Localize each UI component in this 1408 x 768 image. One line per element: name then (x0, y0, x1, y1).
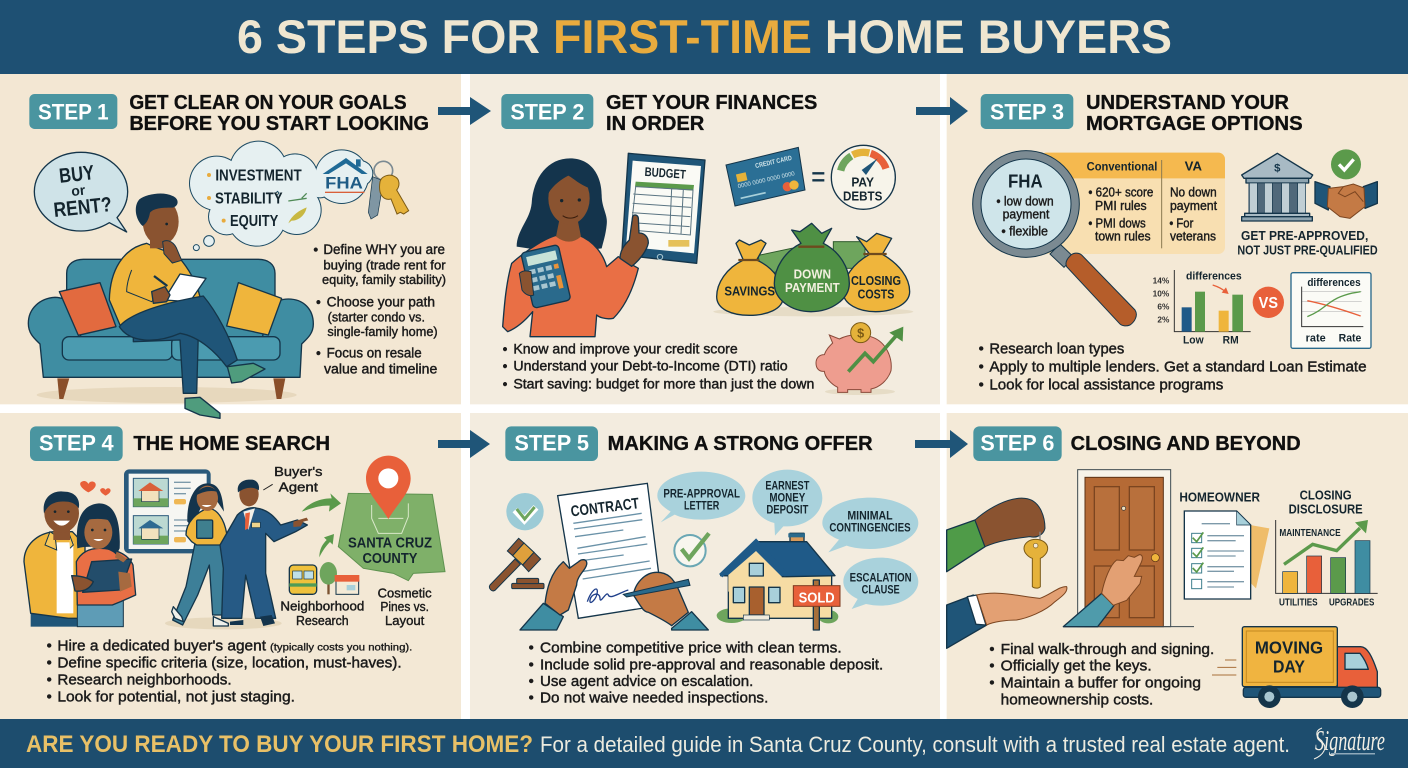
bar chart: loan differences: 2% (1157, 315, 1169, 324)
step 3 heading: UNDERSTAND YOUR (1086, 92, 1289, 114)
icon: magnifying glass FHA: FHA (1008, 170, 1043, 191)
map: santa cruz county: COUNTY (362, 551, 418, 567)
step 3 badge: STEP 3 (990, 99, 1064, 124)
calculator (521, 245, 571, 308)
loan comparison table: PMI rules (1095, 199, 1147, 213)
step 1 bullet list: buying (trade rent for (323, 258, 446, 272)
icon: credit gauge pay debts: PAY (851, 175, 874, 190)
icon: credit gauge pay debts (831, 145, 895, 209)
step 3 bullet list: • (979, 377, 984, 393)
step 4 bullet list (47, 639, 412, 706)
loan comparison table: • PMI dows (1088, 217, 1146, 231)
footer guidance text: For a detailed guide in Santa Cruz County, consult with a trusted real estate agent. (540, 732, 1290, 757)
label: get pre-approved: NOT JUST PRE-QUALIFIED (1237, 243, 1378, 257)
footer banner (0, 719, 1408, 768)
step 1 badge: STEP 1 (38, 99, 109, 124)
illustration: open receiving hand (947, 587, 1067, 648)
icon: sold house: SOLD (799, 590, 835, 606)
line chart: rate comparison (1291, 273, 1371, 348)
callout: buy or rent: BUY (58, 161, 95, 188)
thought cloud: INVESTMENT (215, 168, 302, 185)
label: neighborhood research (280, 600, 364, 628)
icon: moving truck: DAY (1273, 657, 1305, 677)
step 1 bullet list (313, 242, 446, 376)
step 4 bullet list: (typically costs you nothing). (270, 643, 412, 654)
pointing hand (620, 215, 648, 266)
callout: escalation clause: ESCALATION (850, 571, 912, 585)
callout: buy or rent: or (70, 182, 86, 199)
step 1 bullet list: Define WHY you are (323, 242, 445, 257)
step 1 bullet list: Focus on resale (327, 346, 422, 361)
step 3 bullet list: • (979, 360, 984, 376)
step 3 badge (981, 94, 1073, 129)
step 6 bullet list: Maintain a buffer for ongoing (1001, 676, 1201, 692)
icon: moving truck: MOVING (1255, 638, 1323, 658)
step 4 bullet list: Hire a dedicated buyer's agent (57, 639, 266, 655)
bar chart: homeownership costs: UTILITIES (1279, 598, 1318, 609)
step 4 bullet list: Research neighborhoods. (57, 672, 232, 688)
icon: magnifying glass FHA: • low down (996, 194, 1054, 208)
step 5 badge: STEP 5 (514, 431, 589, 456)
map: santa cruz county: SANTA CRUZ (348, 536, 432, 552)
hand with pen (672, 612, 708, 630)
callout: earnest money deposit (752, 470, 822, 536)
loan comparison table: No down (1170, 186, 1217, 200)
label: buyer's agent (263, 465, 322, 495)
bar chart: loan differences: RM (1223, 334, 1239, 346)
step 5 bullet list: Combine competitive price with clean terms. (540, 640, 842, 656)
icon: money bags: PAYMENT (785, 281, 840, 295)
step 4 bullet list: • (47, 639, 52, 655)
closing costs bag (843, 233, 910, 312)
icon: bank building (1242, 153, 1313, 221)
checklist document (1184, 511, 1269, 599)
step 1 bullet list: • (316, 346, 321, 361)
icon: money bags: DOWN (794, 267, 831, 281)
icon: magnifying glass FHA (973, 151, 1136, 326)
callout: minimal contingencies: MINIMAL (847, 508, 893, 522)
step 3 bullet list (979, 341, 1367, 393)
step 4 bullet list: • (47, 690, 52, 706)
label: cosmetic vs layout: Layout (385, 614, 425, 628)
loan comparison table: • For (1169, 217, 1193, 231)
map pin (366, 456, 411, 519)
icon: versus badge (1253, 287, 1284, 318)
step 1 heading: BEFORE YOU START LOOKING (129, 113, 429, 135)
panel: step 1 get clear on your goals (0, 74, 461, 418)
icon: check badge (506, 493, 544, 530)
icon: school bus, tree and shop (289, 562, 359, 594)
bar chart: loan differences: 10% (1153, 290, 1169, 299)
label: cosmetic vs layout: Cosmetic (378, 586, 432, 600)
thought cloud: STABILITY (215, 190, 283, 207)
icon: FHA house logo (323, 158, 368, 193)
step 3 heading: MORTGAGE OPTIONS (1086, 113, 1303, 135)
label: buyer's agent: Agent (279, 481, 319, 495)
step 6 bullet list: Final walk-through and signing. (1001, 642, 1214, 658)
icon: handshake (1315, 182, 1377, 218)
line chart: rate comparison: rate (1306, 333, 1326, 345)
step 6 bullet list: • (989, 659, 994, 675)
illustration: happy couple with tablet (24, 481, 136, 627)
step 1 bullet list: value and timeline (324, 361, 437, 376)
icon: magnifying glass FHA: payment (1003, 208, 1050, 222)
step 3 bullet list: Look for local assistance programs (989, 377, 1223, 393)
arrows toward map (302, 493, 341, 557)
bar chart: loan differences (1153, 270, 1251, 346)
step 1 badge (29, 94, 117, 129)
step 2 heading: GET YOUR FINANCES (606, 92, 817, 114)
step 2 bullet list: Know and improve your credit score (513, 341, 738, 356)
loan comparison table: • 620+ score (1088, 186, 1153, 200)
callout: buy or rent (34, 152, 128, 232)
step 3 bullet list: • (979, 341, 984, 357)
illustration: hand dangling key (947, 498, 1048, 588)
label: cosmetic vs layout (378, 586, 432, 628)
step 5 bullet list: • (529, 640, 534, 656)
step 5 bullet list (529, 640, 883, 707)
step 2 bullet list: Start saving: budget for more than just the down (513, 376, 814, 391)
step 5 bullet list: Include solid pre-approval and reasonable deposit. (540, 657, 883, 673)
step 5 bullet list: • (529, 674, 534, 690)
illustration: person thinking on sofa (28, 194, 313, 403)
step 3 bullet list: Research loan types (989, 341, 1124, 357)
callout: buy or rent: RENT? (52, 193, 113, 222)
bar chart: loan differences: 14% (1153, 276, 1169, 285)
step 3 heading (1086, 92, 1303, 135)
step 6 bullet list: Officially get the keys. (1001, 659, 1152, 675)
panel: step 5 making a strong offer (470, 413, 940, 719)
loan comparison table: VA (1185, 160, 1202, 174)
panel: step 4 the home search (0, 413, 461, 719)
header banner (0, 0, 1408, 74)
label: closing disclosure (1289, 488, 1363, 516)
illustration: hand pushing door (1063, 555, 1142, 627)
illustration: woman and buyer's agent (165, 480, 308, 629)
step 1 heading (129, 92, 429, 135)
icon: gavel (489, 538, 544, 591)
step 6 bullet list: homeownership costs. (1001, 692, 1153, 708)
label: buyer's agent: Buyer's (274, 465, 322, 479)
arrow: step 2 to step 3 (916, 97, 968, 125)
illustration: front door (1063, 470, 1194, 627)
thought cloud (189, 141, 373, 251)
bar chart: loan differences: differences (1186, 270, 1242, 282)
callout: earnest money deposit: DEPOSIT (766, 503, 809, 517)
callout: earnest money deposit: EARNEST (765, 479, 810, 493)
hand holding document (520, 603, 563, 630)
illustration: listing screen (124, 469, 211, 553)
icon: house keys (368, 161, 409, 219)
callout: escalation clause (843, 558, 918, 609)
arrow: step 5 to step 6 (915, 430, 968, 458)
step 5 bullet list: Do not waive needed inspections. (540, 691, 768, 707)
loan comparison table: payment (1170, 199, 1217, 213)
equals sign (812, 173, 824, 180)
step 1 heading: GET CLEAR ON YOUR GOALS (129, 92, 407, 114)
step 5 heading: MAKING A STRONG OFFER (608, 433, 873, 455)
step 5 badge (505, 426, 598, 461)
notepad (164, 274, 206, 302)
step 6 bullet list: • (989, 642, 994, 658)
callout: minimal contingencies: CONTINGENCIES (829, 521, 911, 535)
icon: check mark circle (674, 533, 709, 566)
step 5 bullet list: • (529, 691, 534, 707)
step 1 bullet list: (starter condo vs. (328, 311, 425, 325)
step 4 heading: THE HOME SEARCH (133, 433, 330, 455)
callout: minimal contingencies (822, 498, 918, 552)
loan comparison table (1040, 153, 1225, 254)
step 4 bullet list: Look for potential, not just staging. (57, 690, 295, 706)
icon: lower shoe (185, 397, 220, 418)
illustration: woman with calculator (503, 158, 638, 337)
map: santa cruz county (338, 456, 445, 581)
icon: money bags: CLOSING (851, 274, 901, 288)
step 2 bullet list: • (503, 341, 508, 356)
icon: money bags (713, 223, 913, 316)
step 6 bullet list (989, 642, 1214, 708)
step 2 bullet list: Understand your Debt-to-Income (DTI) ratio (513, 359, 788, 374)
bar chart: loan differences: 6% (1157, 302, 1169, 311)
callout: pre-approval letter: LETTER (684, 499, 720, 513)
step 2 badge: STEP 2 (510, 99, 584, 124)
contract document with signing hands: CONTRACT (570, 495, 641, 520)
step 4 bullet list: • (47, 672, 52, 688)
callout: pre-approval letter (657, 472, 745, 522)
pants (133, 327, 198, 393)
step 1 bullet list: Choose your path (327, 295, 435, 310)
step 1 bullet list: single-family home) (327, 325, 438, 339)
line chart: rate comparison: Rate (1339, 333, 1361, 345)
step 1 bullet list: • (313, 242, 318, 257)
arrow: step 4 to step 5 (438, 430, 490, 458)
bar chart: loan differences: Low (1183, 334, 1204, 346)
icon: money bags: SAVINGS (724, 284, 775, 298)
callout: pre-approval letter: PRE-APPROVAL (663, 487, 740, 501)
label: neighborhood research: Research (296, 614, 349, 628)
icon: budget tablet: BUDGET (644, 165, 687, 182)
step 4 badge (30, 426, 123, 461)
step 2 bullet list (503, 341, 814, 391)
panel: step 3 understand your mortgage options (947, 74, 1408, 404)
icon: FHA house logo: FHA (325, 173, 363, 192)
step 2 bullet list: • (503, 359, 508, 374)
icon: piggy bank with growth arrow: $ (857, 326, 864, 340)
footer call to action: ARE YOU READY TO BUY YOUR FIRST HOME? (26, 731, 533, 758)
callout: escalation clause: CLAUSE (862, 583, 900, 597)
step 5 bullet list: Use agent advice on escalation. (540, 674, 753, 690)
step 6 badge: STEP 6 (980, 431, 1054, 456)
icon: credit card (726, 147, 805, 206)
icon: money bags: COSTS (858, 288, 894, 302)
icon: sold house (717, 533, 840, 630)
step 2 heading: IN ORDER (606, 113, 705, 135)
step 4 bullet list: • (47, 656, 52, 672)
icon: credit card: CREDIT CARD (755, 155, 793, 170)
label: cosmetic vs layout: Pines vs. (380, 600, 429, 614)
contract document with signing hands (520, 483, 708, 630)
step 5 bullet list: • (529, 657, 534, 673)
icon: piggy bank with growth arrow (816, 323, 903, 395)
torso (109, 243, 200, 325)
savings bag (717, 240, 783, 315)
icon: bank building: $ (1274, 163, 1281, 175)
label: get pre-approved: GET PRE-APPROVED, (1241, 229, 1368, 243)
panel: step 2 get your finances in order (470, 74, 940, 404)
icon: moving truck (1212, 627, 1381, 708)
loan comparison table: town rules (1095, 230, 1151, 244)
thought cloud: EQUITY (230, 213, 279, 230)
step 6 bullet list: • (989, 676, 994, 692)
label: closing disclosure: DISCLOSURE (1289, 502, 1363, 516)
line chart: rate comparison: differences (1307, 277, 1361, 289)
icon: approved check (1331, 149, 1361, 179)
label: closing disclosure: CLOSING (1300, 488, 1352, 502)
bar chart: homeownership costs: UPGRADES (1329, 598, 1375, 609)
step 2 bullet list: • (503, 376, 508, 391)
panel: step 6 closing and beyond (947, 413, 1408, 719)
icon: budget tablet (620, 153, 705, 266)
shoe (227, 363, 265, 383)
step 3 bullet list: Apply to multiple lenders. Get a standard Loan Estimate (989, 360, 1367, 376)
step 6 heading: CLOSING AND BEYOND (1071, 433, 1301, 455)
step 2 badge (501, 94, 593, 129)
icon: versus badge: VS (1259, 295, 1278, 312)
step 6 badge (973, 426, 1062, 461)
callout: earnest money deposit: MONEY (769, 491, 805, 505)
step 2 heading (606, 92, 817, 135)
icon: credit card: 0000 0000 0000 0000 (737, 171, 796, 190)
orange pillow (59, 283, 116, 335)
step 1 bullet list: • (316, 295, 321, 310)
yellow pillow (227, 283, 282, 335)
label: homeowner: HOMEOWNER (1179, 491, 1260, 505)
loan comparison table: Conventional (1087, 160, 1157, 174)
bar chart: homeownership costs (1276, 520, 1378, 609)
title: 6 STEPS FOR FIRST-TIME HOME BUYERS (237, 10, 1172, 63)
step 4 badge: STEP 4 (39, 431, 114, 456)
step 1 bullet list: equity, family stability) (322, 273, 446, 287)
icon: magnifying glass FHA: • flexible (1001, 224, 1048, 238)
down payment bag (774, 223, 849, 312)
bar chart: homeownership costs: MAINTENANCE (1279, 528, 1341, 539)
label: get pre-approved (1237, 229, 1378, 257)
loan comparison table: veterans (1170, 230, 1216, 244)
label: neighborhood research: Neighborhood (280, 600, 364, 614)
icon: credit gauge pay debts: DEBTS (843, 189, 882, 204)
step 4 bullet list: Define specific criteria (size, location, must-haves). (57, 656, 402, 672)
arrow: step 1 to step 2 (438, 97, 491, 125)
